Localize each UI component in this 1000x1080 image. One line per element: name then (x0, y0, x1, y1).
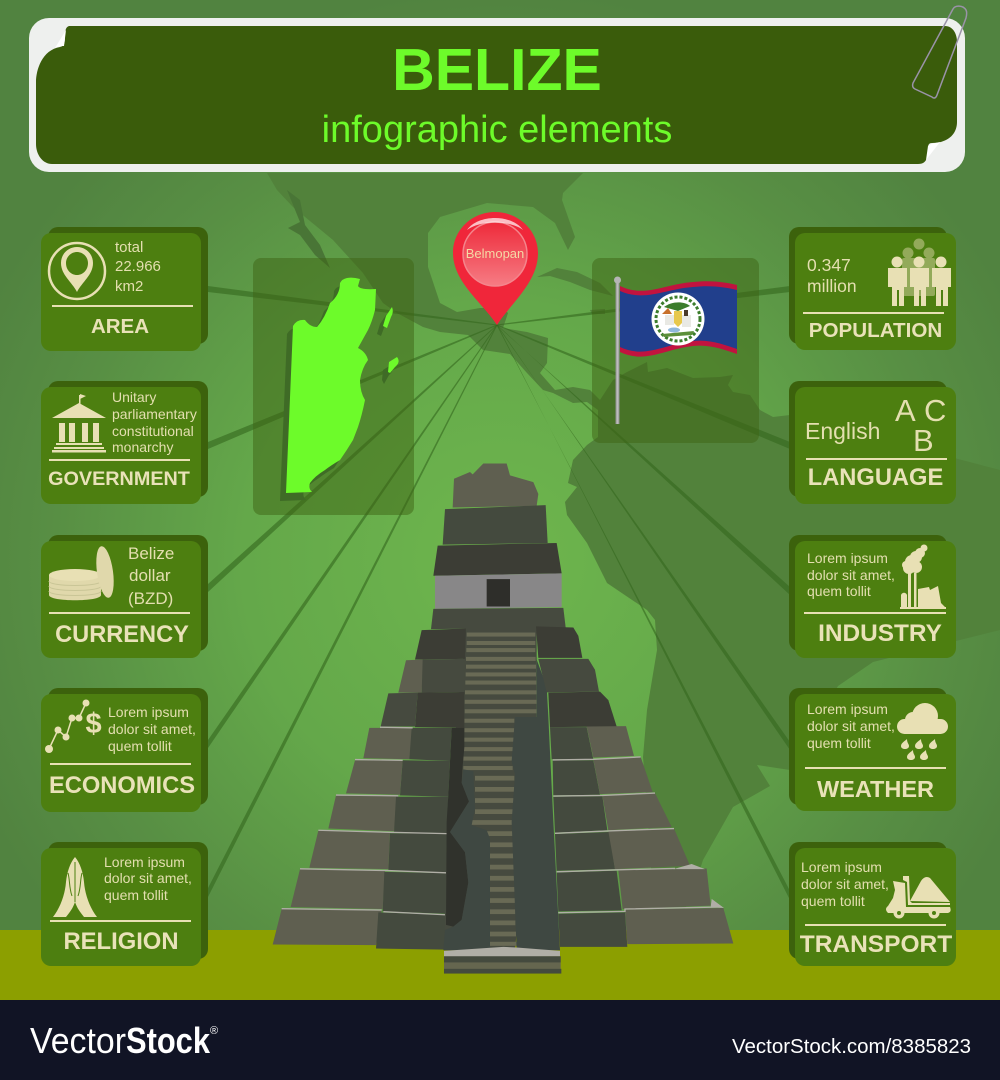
population value: 0.347 (807, 255, 851, 275)
label: ECONOMICS (49, 773, 195, 799)
base steps (444, 947, 561, 974)
world map silhouette (267, 173, 1000, 935)
image id: VectorStock.com/8385823 (732, 1036, 971, 1058)
central staircase (444, 627, 537, 950)
card: population (789, 227, 956, 350)
industry text: dolor sit amet, (807, 567, 895, 583)
truck wheel hubs (897, 911, 936, 915)
roof comb (453, 464, 538, 507)
label: POPULATION (809, 319, 942, 342)
icon: people (888, 238, 951, 306)
government type: parliamentary (112, 406, 197, 422)
label: WEATHER (817, 776, 934, 802)
panel: flag backdrop (592, 258, 759, 443)
label: CURRENCY (55, 622, 189, 648)
weather text: Lorem ipsum (807, 701, 888, 717)
pyramid temple (273, 464, 733, 974)
government type: monarchy (112, 439, 173, 455)
flag of Belize (614, 276, 737, 424)
connector lines from the pin to the cards (208, 286, 790, 900)
religion text: dolor sit amet, (104, 870, 192, 886)
upper block (443, 505, 548, 545)
flag cloth (620, 281, 737, 357)
left terraces (273, 628, 466, 950)
label: AREA (91, 315, 149, 338)
label: TRANSPORT (800, 931, 952, 958)
icon: growth chart with dollar: $ (86, 708, 102, 740)
icon: ABC letters (895, 393, 946, 458)
icon: ABC letters: C (924, 393, 946, 428)
area value: total (115, 239, 143, 256)
icon: paper clip (913, 6, 967, 98)
card: industry (789, 535, 956, 658)
government type: Unitary (112, 389, 156, 405)
VectorStock logo: ® (210, 1025, 218, 1037)
staircase crack (446, 728, 469, 927)
card: economics (41, 688, 208, 812)
label: LANGUAGE (808, 465, 943, 491)
religion text: quem tollit (104, 887, 168, 903)
icon: location in circle (49, 243, 105, 299)
transport text: quem tollit (801, 893, 865, 909)
icon: growth chart with dollar (45, 700, 102, 753)
panel: country map backdrop (253, 258, 414, 515)
label: INDUSTRY (818, 620, 942, 647)
title: BELIZE (392, 37, 602, 103)
card: government (41, 381, 208, 504)
right staircase wall (512, 627, 560, 950)
religion text: Lorem ipsum (104, 854, 185, 870)
card: weather (789, 688, 956, 811)
economics text: dolor sit amet, (108, 721, 196, 737)
card: transport (789, 842, 956, 966)
collapsed rubble (443, 769, 490, 950)
currency name: dollar (129, 566, 171, 585)
weather text: dolor sit amet, (807, 718, 895, 734)
footer bar (0, 1000, 1000, 1080)
government type: constitutional (112, 423, 194, 439)
subtitle: infographic elements (322, 109, 672, 151)
icon: ABC letters: B (913, 423, 934, 458)
right terraces (536, 626, 733, 947)
flag emblem (652, 292, 704, 346)
industry text: quem tollit (807, 583, 871, 599)
icon: ABC letters: A (895, 393, 916, 428)
currency name: (BZD) (128, 589, 173, 608)
transport text: Lorem ipsum (801, 859, 882, 875)
card: religion (41, 842, 208, 966)
card: area (41, 227, 208, 351)
ground (0, 930, 1000, 1000)
Baja California strip (287, 190, 330, 268)
card: language (789, 381, 956, 504)
icon: factory (900, 544, 946, 609)
card: currency (41, 535, 208, 658)
map of Belize (280, 278, 399, 501)
population value: million (807, 276, 857, 296)
industry text: Lorem ipsum (807, 550, 888, 566)
title banner (29, 18, 965, 172)
weather text: quem tollit (807, 735, 871, 751)
icon: government building (52, 394, 106, 452)
economics text: Lorem ipsum (108, 704, 189, 720)
transport text: dolor sit amet, (801, 876, 889, 892)
economics text: quem tollit (108, 738, 172, 754)
map pin: Belmopan: Belmopan (466, 246, 524, 261)
flag pole (614, 276, 621, 424)
temple chamber (435, 573, 562, 609)
icon: coins (49, 545, 117, 600)
currency name: Belize (128, 544, 174, 563)
area value: 22.966 (115, 258, 161, 275)
icon: rain cloud (897, 703, 948, 760)
map pin: Belmopan (453, 212, 538, 325)
VectorStock logo: VectorStock (30, 1020, 224, 1061)
label: RELIGION (63, 928, 179, 955)
icon: dump truck (886, 876, 951, 918)
language name: English (805, 418, 880, 444)
icon: praying hands (53, 857, 97, 917)
label: GOVERNMENT (48, 468, 190, 490)
area value: km2 (115, 278, 143, 295)
